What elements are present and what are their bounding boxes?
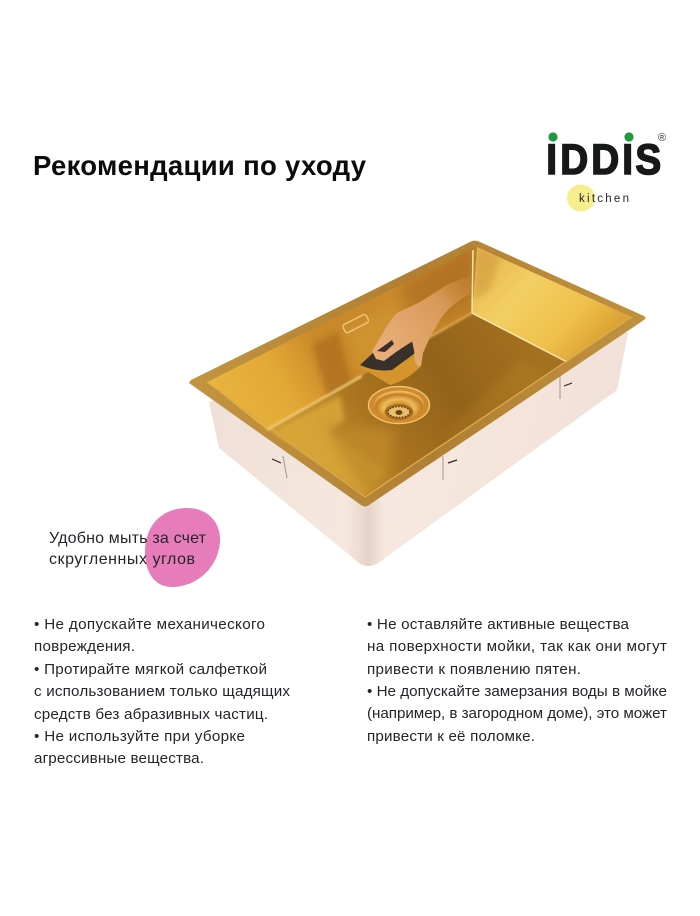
sink floor [267,313,567,497]
body corner shading [345,500,385,566]
finger gap [377,340,394,352]
text block: left column: • Не используйте при уборке [34,728,245,745]
right wall ledge [472,250,567,362]
callout: rounded corners: скругленных углов [49,551,195,568]
icon: yellow blob [567,184,595,212]
sink body [209,300,628,566]
text block: right column: на поверхности мойки, так как они могут [367,638,667,655]
text block: left column: агрессивные вещества. [34,750,204,767]
text block: left column: • Не допускайте механического [34,616,265,633]
logo subtitle: kitchen [579,193,629,205]
text block: left column: средств без абразивных частиц. [34,706,268,723]
text block: right column [367,616,667,745]
logo: IDDIS kitchen [546,132,666,212]
callout text: Удобно мыть за счет [49,530,207,547]
upper-left wall [207,247,475,430]
icon: sponge [360,338,421,385]
callout: rounded corners [49,508,220,587]
overflow [342,314,369,333]
text block: right column: привести к появлению пятен. [367,661,581,678]
icon: hand [372,277,472,366]
wall reflection [312,332,352,398]
text block: right column: • Не допускайте замерзания воды в мойке [367,683,667,700]
body notches [272,376,572,480]
back-right wall [472,247,632,362]
text block: left column [34,616,290,767]
sink rim [189,241,646,506]
text block: right column: привести к её поломке. [367,728,535,745]
text block: right column: • Не оставляйте активные вещества [367,616,630,633]
text block: left column: с использованием только щадящих [34,683,290,700]
text block: right column: (например, в загородном доме), это может [367,705,667,722]
registered mark: ® [658,132,666,144]
logo wordmark: IDDIS [546,135,661,183]
inner rim line [207,317,632,497]
pink blob [145,508,220,587]
title: Рекомендации по уходу [33,150,367,181]
text block: left column: повреждения. [34,638,135,655]
illustration: gold sink [189,241,646,566]
icon: green dots [548,132,634,142]
text block: left column: • Протирайте мягкой салфеткой [34,661,267,678]
drain [368,386,430,424]
floor crease highlight [267,376,362,430]
